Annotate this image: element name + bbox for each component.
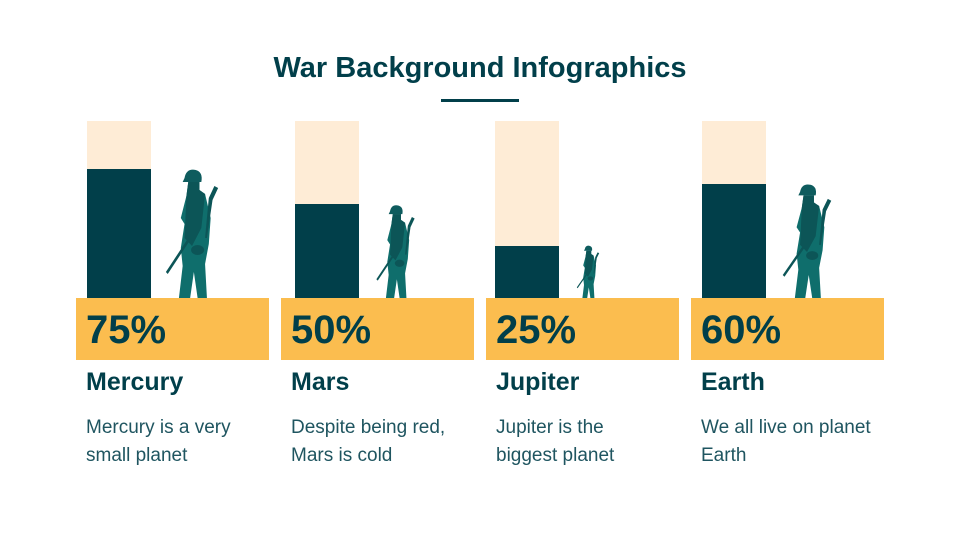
title underline — [441, 99, 519, 102]
percent: 25% — [496, 308, 576, 352]
percent: 75% — [86, 308, 166, 352]
bar — [702, 121, 766, 298]
description: biggest planet — [496, 445, 614, 466]
bar — [495, 121, 559, 298]
description — [86, 417, 231, 466]
icon: soldier — [576, 246, 600, 298]
description: We all live on planet — [701, 417, 871, 438]
name: Mercury — [86, 368, 183, 396]
name: Earth — [701, 368, 765, 396]
panel: Mercury — [76, 121, 269, 466]
description: Mars is cold — [291, 445, 392, 466]
percent band — [486, 298, 679, 360]
name: Jupiter — [496, 368, 579, 396]
icon: soldier — [166, 170, 218, 298]
panel: Mars — [281, 121, 474, 466]
panel: Earth — [691, 121, 884, 466]
icon: soldier — [782, 184, 832, 298]
description: Mercury is a very — [86, 417, 231, 438]
description — [496, 417, 614, 466]
percent: 50% — [291, 308, 371, 352]
percent band — [281, 298, 474, 360]
description: Despite being red, — [291, 417, 445, 438]
panel: Jupiter — [486, 121, 679, 466]
percent: 60% — [701, 308, 781, 352]
bar — [295, 121, 359, 298]
percent band — [76, 298, 269, 360]
description — [701, 417, 871, 466]
title: War Background Infographics — [273, 52, 687, 84]
name: Mars — [291, 368, 349, 396]
percent band — [691, 298, 884, 360]
description: Jupiter is the — [496, 417, 604, 438]
bar — [87, 121, 151, 298]
description — [291, 417, 445, 466]
description: small planet — [86, 445, 187, 466]
description: Earth — [701, 445, 746, 466]
icon: soldier — [376, 205, 415, 298]
